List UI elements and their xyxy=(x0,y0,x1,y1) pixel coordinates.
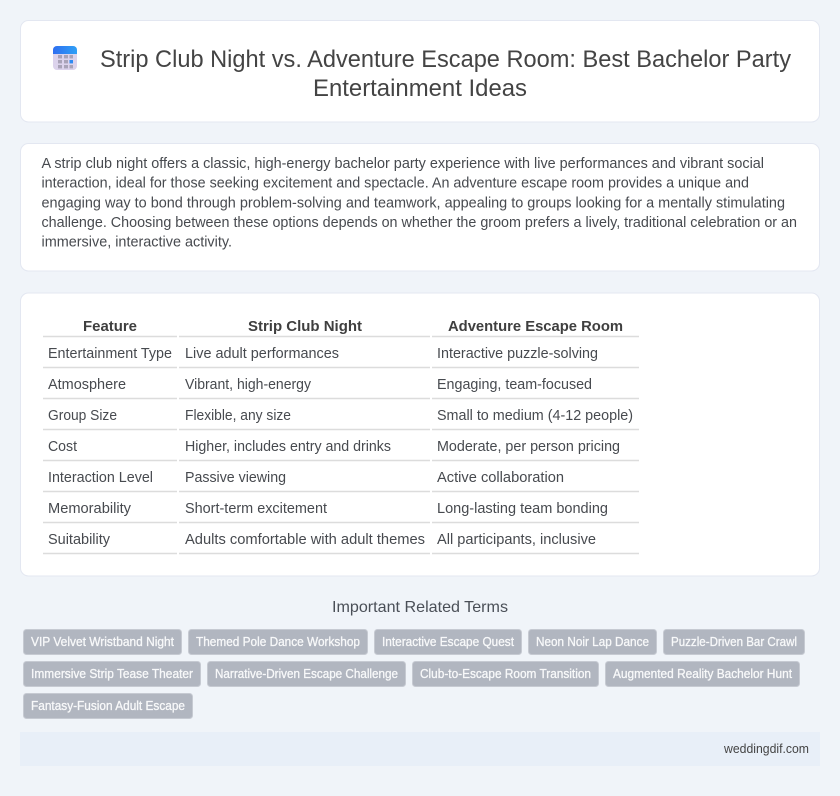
row: interaction level xyxy=(48,470,564,486)
row: cost: Higher, includes entry and drinks xyxy=(185,439,391,455)
tag: Immersive Strip Tease Theater: Immersive Strip Tease Theater xyxy=(31,666,194,681)
tag: VIP Velvet Wristband Night: VIP Velvet Wristband Night xyxy=(31,634,174,649)
row: interaction level: Active collaboration xyxy=(437,470,564,486)
tag: Neon Noir Lap Dance xyxy=(528,630,656,654)
panel: comparison table xyxy=(20,293,820,576)
tag: Neon Noir Lap Dance: Neon Noir Lap Dance xyxy=(536,634,649,649)
row: memorability xyxy=(48,501,608,517)
row: memorability: Memorability xyxy=(48,501,132,517)
text block: introduction paragraph: A strip club night offers a classic, high-energy bachelor party experience with live performances and vibrant social xyxy=(42,156,764,172)
row: atmosphere: Engaging, team-focused xyxy=(437,377,592,393)
row: suitability xyxy=(48,532,596,548)
row: cost xyxy=(48,439,620,455)
text block: introduction paragraph: engaging way to bond through problem-solving and teamwork, appealing to groups looking for a mentally stimulating xyxy=(42,196,785,212)
tag: Narrative-Driven Escape Challenge xyxy=(208,662,406,686)
text block: introduction paragraph: interaction, ideal for those seeking excitement and spectacle. An adventure escape room provides a unique and xyxy=(42,176,749,192)
row: entertainment type: Interactive puzzle-solving xyxy=(437,346,598,362)
row: memorability: Short-term excitement xyxy=(185,501,327,517)
heading: related terms: Important Related Terms xyxy=(332,599,508,616)
row: group size: Flexible, any size xyxy=(185,408,291,424)
row: entertainment type: Entertainment Type xyxy=(48,346,172,362)
tag: Club-to-Escape Room Transition: Club-to-Escape Room Transition xyxy=(420,666,591,681)
row: interaction level: Passive viewing xyxy=(185,470,286,486)
row: interaction level: Interaction Level xyxy=(48,470,153,486)
table header row: Feature xyxy=(83,319,137,335)
tag: Club-to-Escape Room Transition xyxy=(412,662,598,686)
tag: Augmented Reality Bachelor Hunt xyxy=(606,662,800,686)
tag: Narrative-Driven Escape Challenge: Narrative-Driven Escape Challenge xyxy=(215,666,398,681)
text block: introduction paragraph: challenge. Choosing between these options depends on whether the groom prefers a lively, traditional celebration or an xyxy=(42,215,797,231)
tag: Immersive Strip Tease Theater xyxy=(24,662,200,686)
tag: Fantasy-Fusion Adult Escape: Fantasy-Fusion Adult Escape xyxy=(31,698,185,713)
row: group size: Group Size xyxy=(48,408,117,424)
tag: Puzzle-Driven Bar Crawl: Puzzle-Driven Bar Crawl xyxy=(671,634,797,649)
row: entertainment type xyxy=(48,346,598,362)
tag: Augmented Reality Bachelor Hunt: Augmented Reality Bachelor Hunt xyxy=(613,666,792,681)
row: cost: Cost xyxy=(48,439,77,455)
text block: introduction paragraph xyxy=(42,156,797,250)
text block: introduction paragraph: immersive, interactive activity. xyxy=(42,234,232,250)
footer: weddingdif.com xyxy=(723,741,809,756)
tag: Themed Pole Dance Workshop xyxy=(188,630,368,654)
row: group size xyxy=(48,408,633,424)
icon: calendar xyxy=(53,46,77,70)
row: group size: Small to medium (4-12 people) xyxy=(437,408,633,424)
row: cost: Moderate, per person pricing xyxy=(437,439,620,455)
tag: Themed Pole Dance Workshop: Themed Pole Dance Workshop xyxy=(196,634,360,649)
row: atmosphere: Atmosphere xyxy=(48,377,126,393)
row: suitability: Adults comfortable with adult themes xyxy=(185,532,425,548)
table header row: Adventure Escape Room xyxy=(448,319,623,335)
title: Strip Club Night vs. Adventure Escape Room: Best Bachelor Party xyxy=(100,46,791,73)
row: atmosphere: Vibrant, high-energy xyxy=(185,377,312,393)
row: atmosphere xyxy=(48,377,592,393)
row: memorability: Long-lasting team bonding xyxy=(437,501,608,517)
title xyxy=(100,46,791,102)
panel: header xyxy=(20,20,820,122)
tag: VIP Velvet Wristband Night xyxy=(24,630,182,654)
row: suitability: All participants, inclusive xyxy=(437,532,596,548)
row: suitability: Suitability xyxy=(48,532,111,548)
panel: introduction xyxy=(20,144,820,271)
tag: Puzzle-Driven Bar Crawl xyxy=(664,630,804,654)
table header row xyxy=(83,319,623,335)
table header row: Strip Club Night xyxy=(248,319,362,335)
panel: related term tags xyxy=(24,630,804,718)
row: entertainment type: Live adult performances xyxy=(185,346,339,362)
footer xyxy=(20,732,820,766)
title: Entertainment Ideas xyxy=(313,75,527,102)
tag: Interactive Escape Quest xyxy=(374,630,522,654)
tag: Interactive Escape Quest: Interactive Escape Quest xyxy=(382,634,514,649)
tag: Fantasy-Fusion Adult Escape xyxy=(24,694,192,718)
